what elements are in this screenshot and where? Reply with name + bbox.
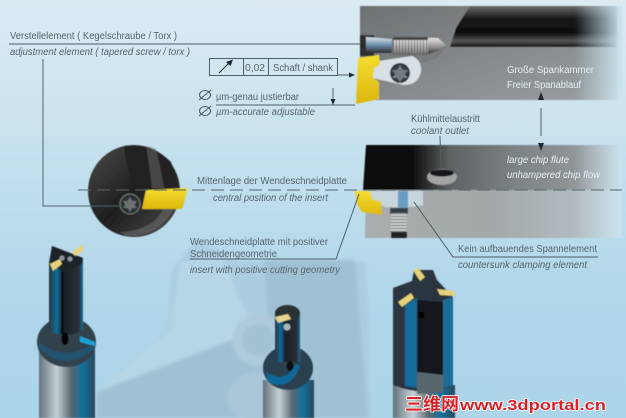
label: coolant outlet: coolant outlet [411, 126, 470, 137]
yellow insert, side [355, 191, 382, 215]
runout tolerance frame: Schaft / shank [273, 63, 334, 74]
watermark: www.3dportal.cn [459, 397, 606, 414]
label: chip flute English: large chip flute [507, 155, 569, 166]
runout tolerance frame [210, 58, 338, 76]
runout tolerance frame: 0,02 [245, 63, 265, 74]
label: coolant outlet [411, 114, 480, 137]
label: central position of the insert: central position of the insert [213, 193, 329, 204]
label: micrometre accurate adjustable: µm-genau justierbar [216, 92, 300, 103]
label: adjustment element: adjustment element ( tapered screw / torx ) [10, 47, 190, 58]
tool: left boring bar [37, 245, 96, 418]
label: positive cutting geometry: insert with positive cutting geometry [190, 265, 341, 276]
label: central position of the insert [197, 176, 347, 204]
ghosted large tool in background [96, 240, 372, 418]
label: countersunk clamping element: countersunk clamping element [458, 260, 588, 271]
flute [124, 146, 180, 189]
insert clamp with torx [372, 56, 421, 85]
central disc: front view of tool with insert [88, 145, 188, 237]
arrowheads [330, 72, 544, 151]
clamping screw [370, 191, 423, 238]
yellow insert [142, 188, 188, 209]
label: positive cutting geometry: Schneidengeometrie [190, 249, 277, 260]
tool: middle boring bar [263, 305, 314, 418]
tool: right three-insert drill [393, 268, 455, 418]
coolant hole [427, 169, 457, 185]
label: micrometre accurate adjustable [199, 90, 315, 118]
label: micrometre accurate adjustable: µm-accurate adjustable [216, 107, 315, 118]
tapered adjustment screw [360, 35, 446, 56]
watermark: 三维网 [405, 395, 459, 414]
label: chip flute German: Freier Spanablauf [507, 80, 581, 91]
label: adjustment element: Verstellelement ( Kegelschraube / Torx ) [10, 31, 177, 42]
label: adjustment element [10, 31, 190, 58]
label: positive cutting geometry [190, 237, 341, 276]
label: chip flute German [507, 65, 595, 91]
label: positive cutting geometry: Wendeschneidplatte mit positiver [190, 237, 329, 248]
label: countersunk clamping element [458, 244, 597, 271]
panel: top photo, chip flute [356, 6, 622, 104]
label: chip flute English: unhampered chip flow [507, 170, 601, 181]
yellow insert [356, 55, 380, 104]
torx screw [120, 194, 140, 214]
panel: bottom photo, coolant outlet [355, 145, 622, 238]
label: chip flute English [507, 155, 601, 181]
label: central position of the insert: Mittenlage der Wendeschneidplatte [197, 176, 347, 187]
label: chip flute German: Große Spankammer [507, 65, 595, 76]
label: coolant outlet: Kühlmittelaustritt [411, 114, 480, 125]
watermark [405, 395, 606, 414]
leader lines and dimensions [9, 44, 622, 259]
dark flute [450, 6, 617, 47]
label: countersunk clamping element: Kein aufbauendes Spannelement [458, 244, 597, 255]
